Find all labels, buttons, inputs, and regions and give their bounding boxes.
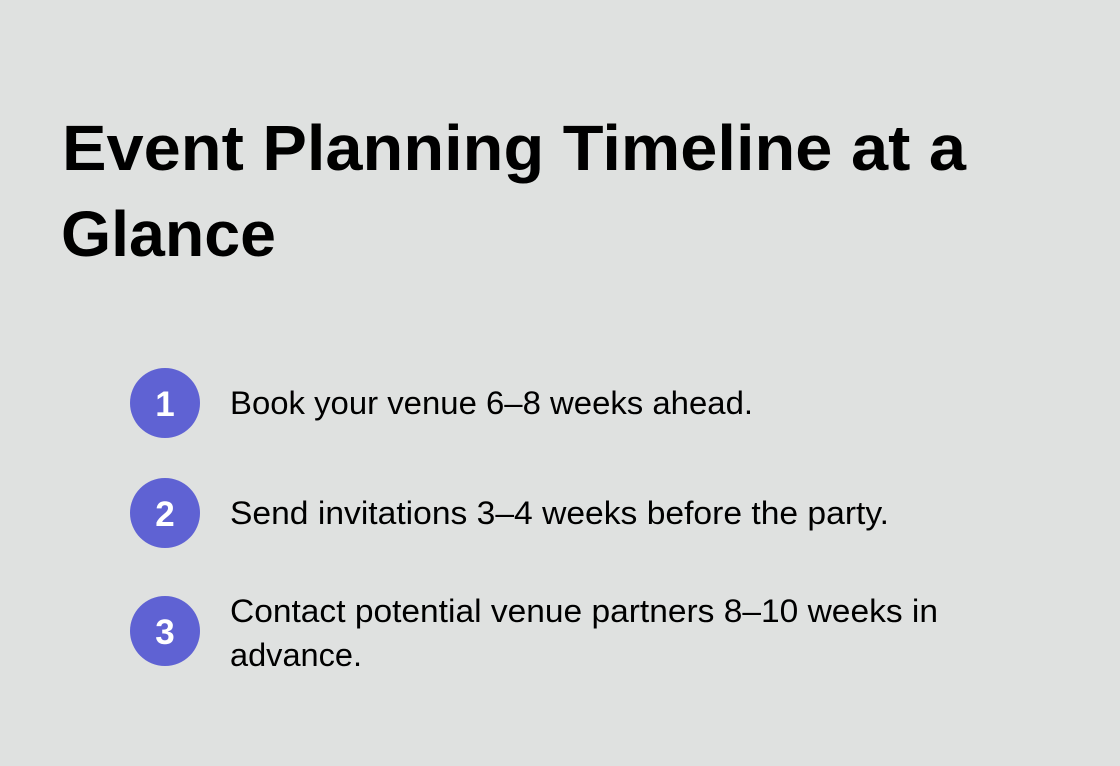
- step 2: [130, 478, 889, 548]
- step 1: [130, 368, 753, 438]
- step 1 number badge: 1: [155, 385, 175, 424]
- step 2 text: Send invitations 3–4 weeks before the party.: [230, 495, 889, 531]
- step 3: [130, 593, 938, 673]
- step 2 number badge: 2: [155, 495, 175, 534]
- step 3 text: Contact potential venue partners 8–10 weeks in: [230, 593, 938, 629]
- step 1 text: Book your venue 6–8 weeks ahead.: [230, 385, 753, 421]
- step 3 number badge: 3: [155, 613, 175, 652]
- title: Glance: [61, 198, 276, 270]
- step 3 number badge: [130, 596, 200, 666]
- step 1 number badge: [130, 368, 200, 438]
- step 3 text: [230, 593, 938, 673]
- title: [61, 112, 966, 270]
- step 2 number badge: [130, 478, 200, 548]
- step 3 text: advance.: [230, 637, 362, 673]
- title: Event Planning Timeline at a: [62, 112, 966, 184]
